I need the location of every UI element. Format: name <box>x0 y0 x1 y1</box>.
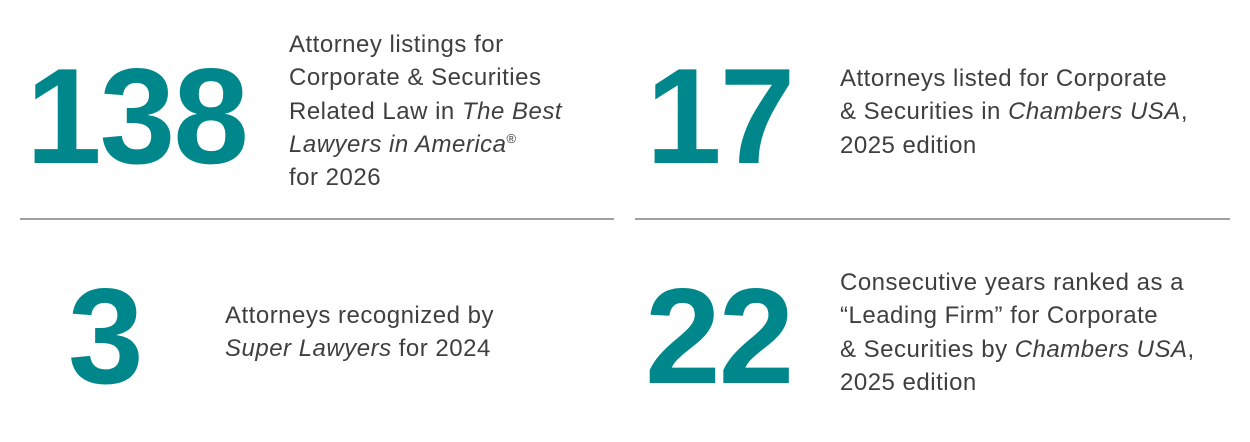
number 3: 3 <box>68 260 142 412</box>
text: chambers attorneys: 2025 edition <box>840 132 977 159</box>
text: best lawyers: Lawyers in America® <box>289 131 517 158</box>
text: best lawyers <box>289 31 562 191</box>
number 17: 17 <box>646 40 793 192</box>
text: best lawyers: Attorney listings for <box>289 31 504 58</box>
text: chambers attorneys: Attorneys listed for Corporate <box>840 65 1167 92</box>
text: leading firm <box>840 269 1195 396</box>
number 138: 138 <box>26 40 247 192</box>
text: chambers attorneys <box>840 65 1188 159</box>
number 22: 22 <box>645 260 792 412</box>
text: leading firm: 2025 edition <box>840 369 977 396</box>
text: leading firm: Consecutive years ranked as a <box>840 269 1184 296</box>
text: leading firm: “Leading Firm” for Corporate <box>840 302 1158 329</box>
text: best lawyers: for 2026 <box>289 164 381 191</box>
text: super lawyers: Super Lawyers for 2024 <box>225 335 491 362</box>
text: chambers attorneys: & Securities in Chambers USA, <box>840 98 1188 125</box>
text: best lawyers: Related Law in The Best <box>289 98 562 125</box>
text: leading firm: & Securities by Chambers USA, <box>840 336 1195 363</box>
text: super lawyers <box>225 302 494 362</box>
text: super lawyers: Attorneys recognized by <box>225 302 494 329</box>
text: best lawyers: Corporate & Securities <box>289 64 541 91</box>
